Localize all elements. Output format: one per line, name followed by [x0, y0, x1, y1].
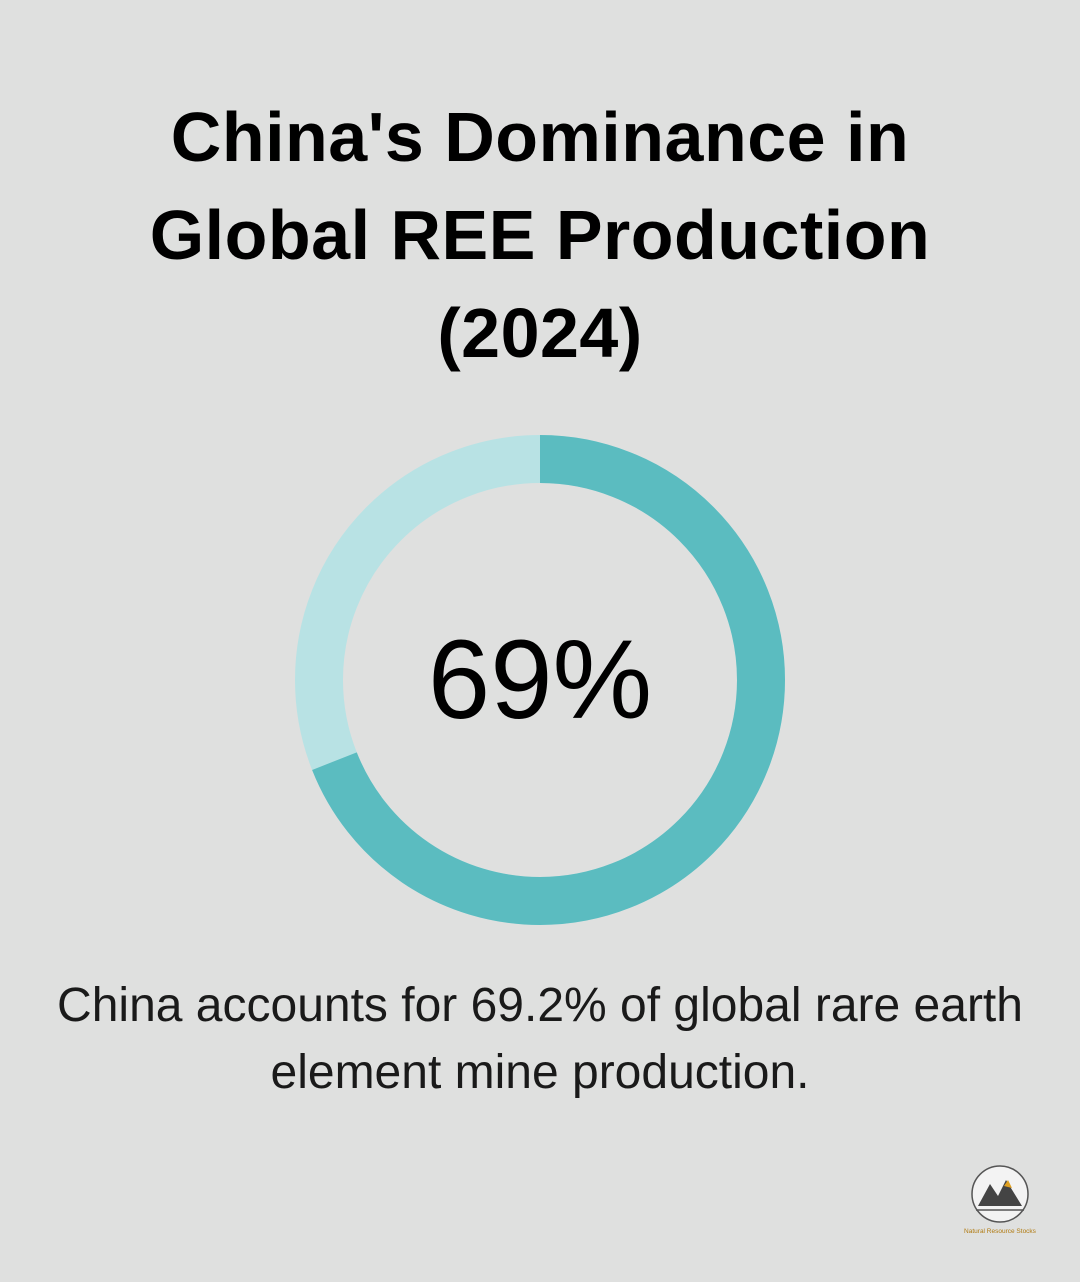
center value: 69% [428, 617, 652, 742]
logo: Natural Resource Stocks [964, 1228, 1037, 1235]
title: Global REE Production [150, 196, 930, 274]
chart ring: remainder [319, 459, 761, 901]
title: China's Dominance in [171, 98, 909, 176]
title [150, 98, 930, 372]
caption text: China accounts for 69.2% of global rare earth [57, 979, 1023, 1032]
caption text: element mine production. [271, 1046, 809, 1099]
caption text [57, 979, 1023, 1099]
logo [964, 1165, 1037, 1235]
chart ring: China share 69% [319, 459, 761, 901]
title: (2024) [437, 294, 643, 372]
